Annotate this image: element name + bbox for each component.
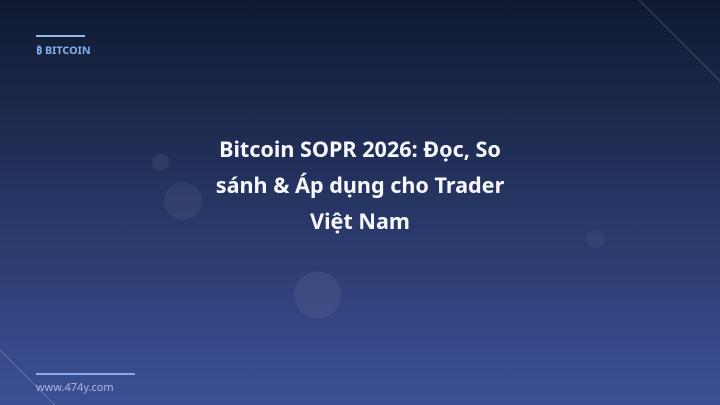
title: Bitcoin SOPR 2026: Đọc, So <box>219 134 501 164</box>
bottom accent line <box>36 373 135 375</box>
top accent line <box>36 35 85 37</box>
category label: ₿ BITCOIN <box>36 43 91 58</box>
title: sánh & Áp dụng cho Trader <box>216 170 504 200</box>
title <box>216 134 504 236</box>
title: Việt Nam <box>310 206 410 236</box>
website url: www.474y.com <box>36 380 114 395</box>
